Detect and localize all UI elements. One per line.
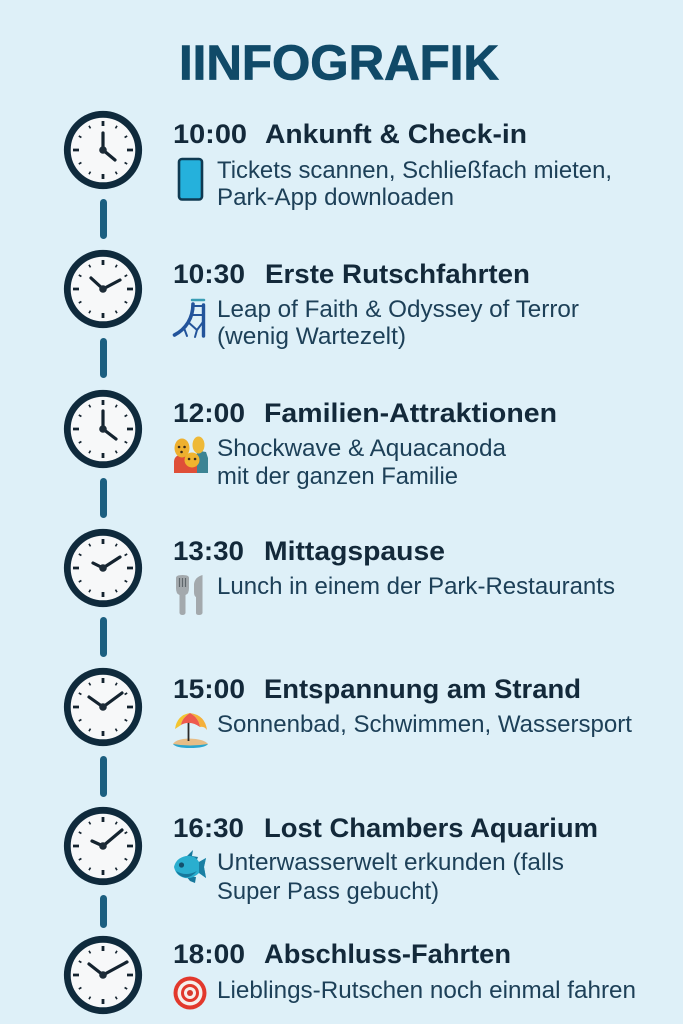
time: 18:00 (173, 939, 245, 969)
step: 15:00 beach (67, 671, 632, 748)
description: Sonnenbad, Schwimmen, Wassersport (217, 711, 632, 738)
icon: clock 12:00 (67, 393, 139, 465)
time: 13:30 (173, 536, 244, 566)
step: 10:30 first rides (67, 253, 579, 350)
time: 10:00 (173, 119, 247, 149)
heading: Ankunft & Check-in (265, 119, 527, 149)
time: 16:30 (173, 813, 244, 843)
description: Tickets scannen, Schließfach mieten, (217, 157, 612, 184)
icon: family (174, 436, 208, 473)
description (217, 849, 564, 905)
step: 10:00 arrival (67, 114, 612, 211)
heading: Erste Rutschfahrten (265, 259, 530, 289)
heading: Entspannung am Strand (264, 674, 581, 704)
icon: clock 18:00 (67, 939, 139, 1011)
timeline connector 3 (100, 478, 107, 518)
heading: Familien-Attraktionen (264, 398, 557, 428)
timeline connector 4 (100, 617, 107, 657)
icon: clock 13:30 (67, 532, 139, 604)
description: Shockwave & Aquacanoda (217, 435, 507, 462)
time: 15:00 (173, 674, 245, 704)
time: 10:30 (173, 259, 245, 289)
step: 13:30 lunch (67, 532, 615, 615)
description: (wenig Wartezelt) (217, 323, 406, 350)
description (217, 435, 507, 490)
time: 12:00 (173, 398, 245, 428)
icon: target (174, 976, 206, 1010)
icon: clock 15:00 (67, 671, 139, 743)
description: Super Pass gebucht) (217, 878, 439, 905)
icon: water slide (174, 300, 204, 337)
description (217, 296, 579, 350)
timeline connector 1 (100, 199, 107, 239)
description: Leap of Faith & Odyssey of Terror (217, 296, 579, 323)
heading: Lost Chambers Aquarium (264, 813, 598, 843)
timeline connector 2 (100, 338, 107, 378)
step: 16:30 aquarium (67, 810, 598, 905)
timeline connector 6 (100, 895, 107, 928)
description: Park-App downloaden (217, 184, 454, 211)
icon: clock 16:30 (67, 810, 139, 882)
icon: smartphone (179, 159, 202, 200)
timeline connector 5 (100, 756, 107, 797)
heading: Abschluss-Fahrten (264, 939, 511, 969)
step: 12:00 family attractions (67, 393, 557, 490)
description: Unterwasserwelt erkunden (falls (217, 849, 564, 876)
title: IINFOGRAFIK (179, 36, 499, 90)
icon: fish (174, 850, 206, 883)
icon: fork and knife (176, 575, 202, 615)
description (217, 157, 612, 211)
description: Lunch in einem der Park-Restaurants (217, 573, 615, 600)
icon: clock 10:30 (67, 253, 139, 325)
description: Lieblings-Rutschen noch einmal fahren (217, 977, 636, 1004)
description: mit der ganzen Familie (217, 463, 458, 490)
icon: clock 10:00 (67, 114, 139, 186)
heading: Mittagspause (264, 536, 445, 566)
icon: beach umbrella (173, 713, 208, 748)
step: 18:00 final rides (67, 939, 636, 1011)
